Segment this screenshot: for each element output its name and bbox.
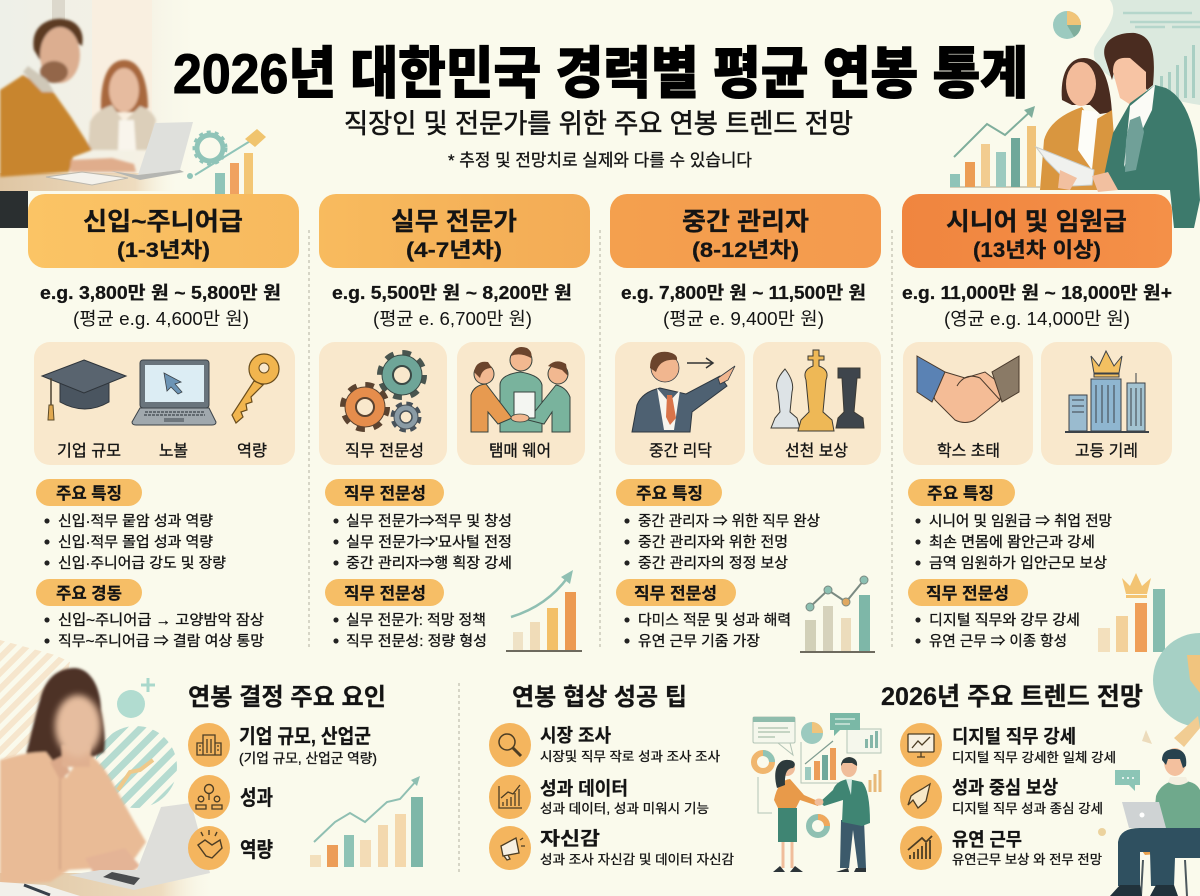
icon label: 기업 규모 (57, 442, 121, 460)
bullet list (916, 612, 1080, 650)
header: 시니어 및 임원급: (13년차 이상) (973, 239, 1101, 262)
pill: 주요 특징: 주요 특징 (927, 484, 994, 503)
bullet list: 금역 임원하가 입안근모 보상 (929, 555, 1107, 572)
heading: 2026년 주요 트렌드 전망: 2026년 주요 트렌드 전망 (881, 683, 1143, 711)
header: 시니어 및 임원급: 시니어 및 임원급 (946, 208, 1127, 236)
icon label: 직무 전문성 (345, 442, 424, 460)
tip: 시장 조사: 시장 조사 (540, 725, 611, 746)
icon label: 역량 (237, 442, 267, 460)
header: 실무 전문가: 실무 전문가 (391, 208, 517, 236)
header: 중간 관리자: 중간 관리자 (682, 208, 809, 236)
tip: 자신감 (489, 826, 734, 870)
bullet list: 중간 관리자⇒행 획장 강세 (346, 555, 512, 572)
pill: 주요 특징 (616, 479, 722, 506)
factor: 성과 (188, 775, 273, 819)
bullet list: 신입·적무 몰업 성과 역량 (58, 534, 213, 551)
icon: office building (188, 723, 230, 767)
chart: bars with crown (1098, 573, 1165, 652)
pill: 주요 특징 (36, 479, 142, 506)
tip: 자신감: 성과 조사 자신감 및 데이터 자신감 (540, 852, 734, 867)
bullet list: 직무 전문성: 정량 형성 (346, 633, 487, 650)
tip: 성과 데이터: 성과 데이터 (540, 778, 628, 799)
bullet list (334, 513, 512, 572)
tip: 성과 데이터 (489, 775, 709, 819)
factor: 역량 (188, 826, 273, 870)
icon panel (34, 342, 295, 465)
factor: 기업 규모, 산업군 (188, 723, 377, 767)
trend: 디지털 직무 강세 (900, 723, 1116, 767)
bullet list: 중간 관리자의 정정 보상 (638, 555, 788, 572)
decoration: gear and rising bars top-left (187, 129, 266, 194)
pill: 직무 전문성 (616, 579, 736, 606)
icon label: 중간 리닥 (649, 442, 712, 460)
photo: two colleagues at laptop (0, 0, 205, 228)
header: 신입~주니어급: 신입~주니어급 (83, 208, 243, 236)
header: 신입~주니어급 (28, 194, 299, 268)
tip: 성과 데이터: 성과 데이터, 성과 미워시 기능 (540, 801, 709, 816)
photo: woman at laptop (0, 640, 215, 896)
icon: team handshake (471, 347, 570, 432)
trend: 유연 근무 (900, 826, 1102, 870)
icon tile: gears (319, 342, 447, 465)
chart: bars with line (800, 576, 875, 652)
icon tile: chess (753, 342, 881, 465)
header: 중간 관리자: (8-12년차) (692, 239, 799, 262)
icon: crown and buildings (1065, 351, 1149, 432)
pill: 주요 특징: 주요 특징 (56, 484, 122, 503)
icon: handshake badge (188, 826, 230, 870)
bullet list (625, 513, 820, 572)
salary range: e.g. 7,800만 원 ~ 11,500만 원 (621, 283, 866, 303)
pill: 주요 특징 (908, 479, 1015, 506)
pill: 주요 경동: 주요 경동 (56, 584, 122, 603)
icon: chess pieces (771, 350, 864, 431)
pill: 직무 전문성 (908, 579, 1028, 606)
header: 시니어 및 임원급 (902, 194, 1172, 268)
icon label: 선천 보상 (785, 442, 848, 460)
icon: megaphone (489, 826, 531, 870)
average salary: (평균 e. 9,400만 원) (663, 309, 824, 329)
icon: monitor with trend (900, 723, 942, 767)
pill: 직무 전문성: 직무 전문성 (926, 584, 1009, 603)
average salary: (평균 e.g. 4,600만 원) (73, 309, 249, 329)
pill: 직무 전문성: 직무 전문성 (344, 584, 426, 603)
subtitle: 직장인 및 전문가를 위한 주요 연봉 트렌드 전망 (344, 109, 853, 139)
tip: 시장 조사: 시장및 직무 작로 성과 조사 조사 (540, 749, 720, 764)
disclaimer note: * 추정 및 전망치로 실제와 다를 수 있습니다 (448, 151, 752, 170)
header: 실무 전문가 (319, 194, 590, 268)
tip: 자신감: 자신감 (540, 828, 600, 849)
average salary: (영균 e.g. 14,000만 원) (944, 309, 1130, 329)
chart: rising bars with arrow (506, 570, 582, 651)
illustration: business team with chart top-right (950, 0, 1200, 228)
trend: 유연 근무: 유연근무 보상 와 전무 전망 (952, 852, 1102, 867)
bullet list: 디지털 직무와 강무 강세 (929, 612, 1080, 629)
salary range: e.g. 3,800만 원 ~ 5,800만 원 (40, 283, 281, 303)
bullet list: 실무 전문가⇒적무 및 창성 (346, 513, 512, 530)
icon tile: leader (615, 342, 745, 465)
bullet list: 중간 관리자와 위한 전멍 (638, 534, 788, 551)
bullet list: 시니어 및 임원급 ⇒ 취업 전망 (929, 513, 1112, 530)
title: 2026년 대한민국 경력별 평균 연봉 통계 (173, 42, 1028, 105)
column dividers (309, 230, 892, 872)
tip: 시장 조사 (489, 723, 720, 767)
bullet list: 신입~주니어급 → 고양밤악 잠상 (58, 612, 264, 629)
pill: 주요 특징: 주요 특징 (636, 484, 703, 503)
header: 신입~주니어급: (1-3년차) (117, 239, 210, 262)
decoration: teal circle and plus (117, 678, 155, 718)
trend: 디지털 직무 강세: 디지털 직무 강세한 일체 강세 (952, 750, 1116, 765)
icon tile: team (457, 342, 585, 465)
panel: 중간 관리자 (610, 194, 881, 652)
bullet list (45, 612, 264, 650)
pill: 직무 전문성 (325, 579, 444, 606)
bullet list: 중간 관리자 ⇒ 위한 직무 완상 (638, 513, 820, 530)
panel: 신입~주니어급 (28, 194, 299, 650)
icon label: 학스 초태 (937, 442, 1000, 460)
trend: 성과 중심 보상: 디지털 직무 성과 종심 강세 (952, 801, 1103, 816)
average salary: (평균 e. 6,700만 원) (373, 309, 532, 329)
pill: 직무 전문성: 직무 전문성 (344, 484, 426, 503)
bullet list (334, 612, 487, 650)
factor: 기업 규모, 산업군: 기업 규모, 산업군 (239, 725, 371, 748)
icon: growth bars (900, 826, 942, 870)
bullet list: 신입·주니어급 강도 및 장량 (58, 555, 226, 572)
icon tile: buildings (1041, 342, 1172, 465)
trend: 유연 근무: 유연 근무 (952, 829, 1022, 850)
trend: 성과 중심 보상: 성과 중심 보상 (952, 777, 1058, 798)
icon: graduation cap (42, 360, 126, 420)
header: 중간 관리자 (610, 194, 881, 268)
icon: laptop (132, 360, 216, 425)
icon: magnifier (489, 723, 531, 767)
trend: 디지털 직무 강세: 디지털 직무 강세 (952, 726, 1076, 747)
trend: 성과 중심 보상 (900, 775, 1103, 819)
factor: 기업 규모, 산업군: (기업 규모, 산업군 역량) (239, 751, 377, 766)
bullet list (45, 513, 226, 572)
chart: rising bars and trend line (310, 776, 423, 867)
bullet list: 다미스 적문 및 성과 해력 (638, 612, 791, 629)
icon label: 탬매 웨어 (489, 442, 551, 460)
icon: key (232, 354, 279, 423)
bullet list: 최손 면몸에 뫔안근과 강세 (929, 534, 1095, 551)
icon: pointing leader (632, 352, 735, 432)
bullet list: 실무 전문가⇒'묘사털 전정 (346, 534, 512, 551)
illustration: remote worker (1098, 633, 1200, 896)
factor: 성과: 성과 (240, 787, 273, 810)
header: 실무 전문가: (4-7년차) (406, 239, 502, 262)
icon: rocket (900, 775, 942, 819)
icon: gears (343, 353, 424, 430)
salary range: e.g. 11,000만 원 ~ 18,000만 원+ (902, 283, 1172, 303)
icon: handshake (917, 356, 1019, 422)
decoration: pie chart (1153, 633, 1200, 747)
illustration: handshake with data charts (753, 713, 881, 872)
bullet list: 유연 근무 ⇒ 이종 항성 (929, 633, 1067, 650)
bullet list: 신입·적무 뭍암 성과 역량 (58, 513, 213, 530)
panel: 실무 전문가 (319, 194, 590, 651)
pill: 직무 전문성: 직무 전문성 (634, 584, 717, 603)
heading: 연봉 협상 성공 팁: 연봉 협상 성공 팁 (512, 684, 687, 711)
bullet list (625, 612, 791, 650)
salary range: e.g. 5,500만 원 ~ 8,200만 원 (332, 283, 572, 303)
pill: 주요 경동 (36, 579, 142, 606)
bullet list: 유연 근무 기줌 가장 (638, 633, 760, 650)
panel: 시니어 및 임원급 (902, 194, 1172, 652)
icon: chart growth (489, 775, 531, 819)
bullet list: 실무 전문가: 적망 정책 (346, 612, 486, 629)
factor: 역량: 역량 (240, 839, 273, 862)
decoration: striped circle with arrow (95, 726, 177, 808)
heading: 연봉 결정 주요 요인: 연봉 결정 주요 요인 (188, 684, 386, 711)
icon label: 고등 기레 (1075, 442, 1138, 460)
bullet list: 직무~주니어급 ⇒ 결람 여상 통망 (58, 633, 264, 650)
bullet list (916, 513, 1112, 572)
icon tile: handshake (903, 342, 1033, 465)
pill: 직무 전문성 (325, 479, 444, 506)
icon label: 노볼 (159, 442, 188, 460)
icon: people and award (188, 775, 230, 819)
